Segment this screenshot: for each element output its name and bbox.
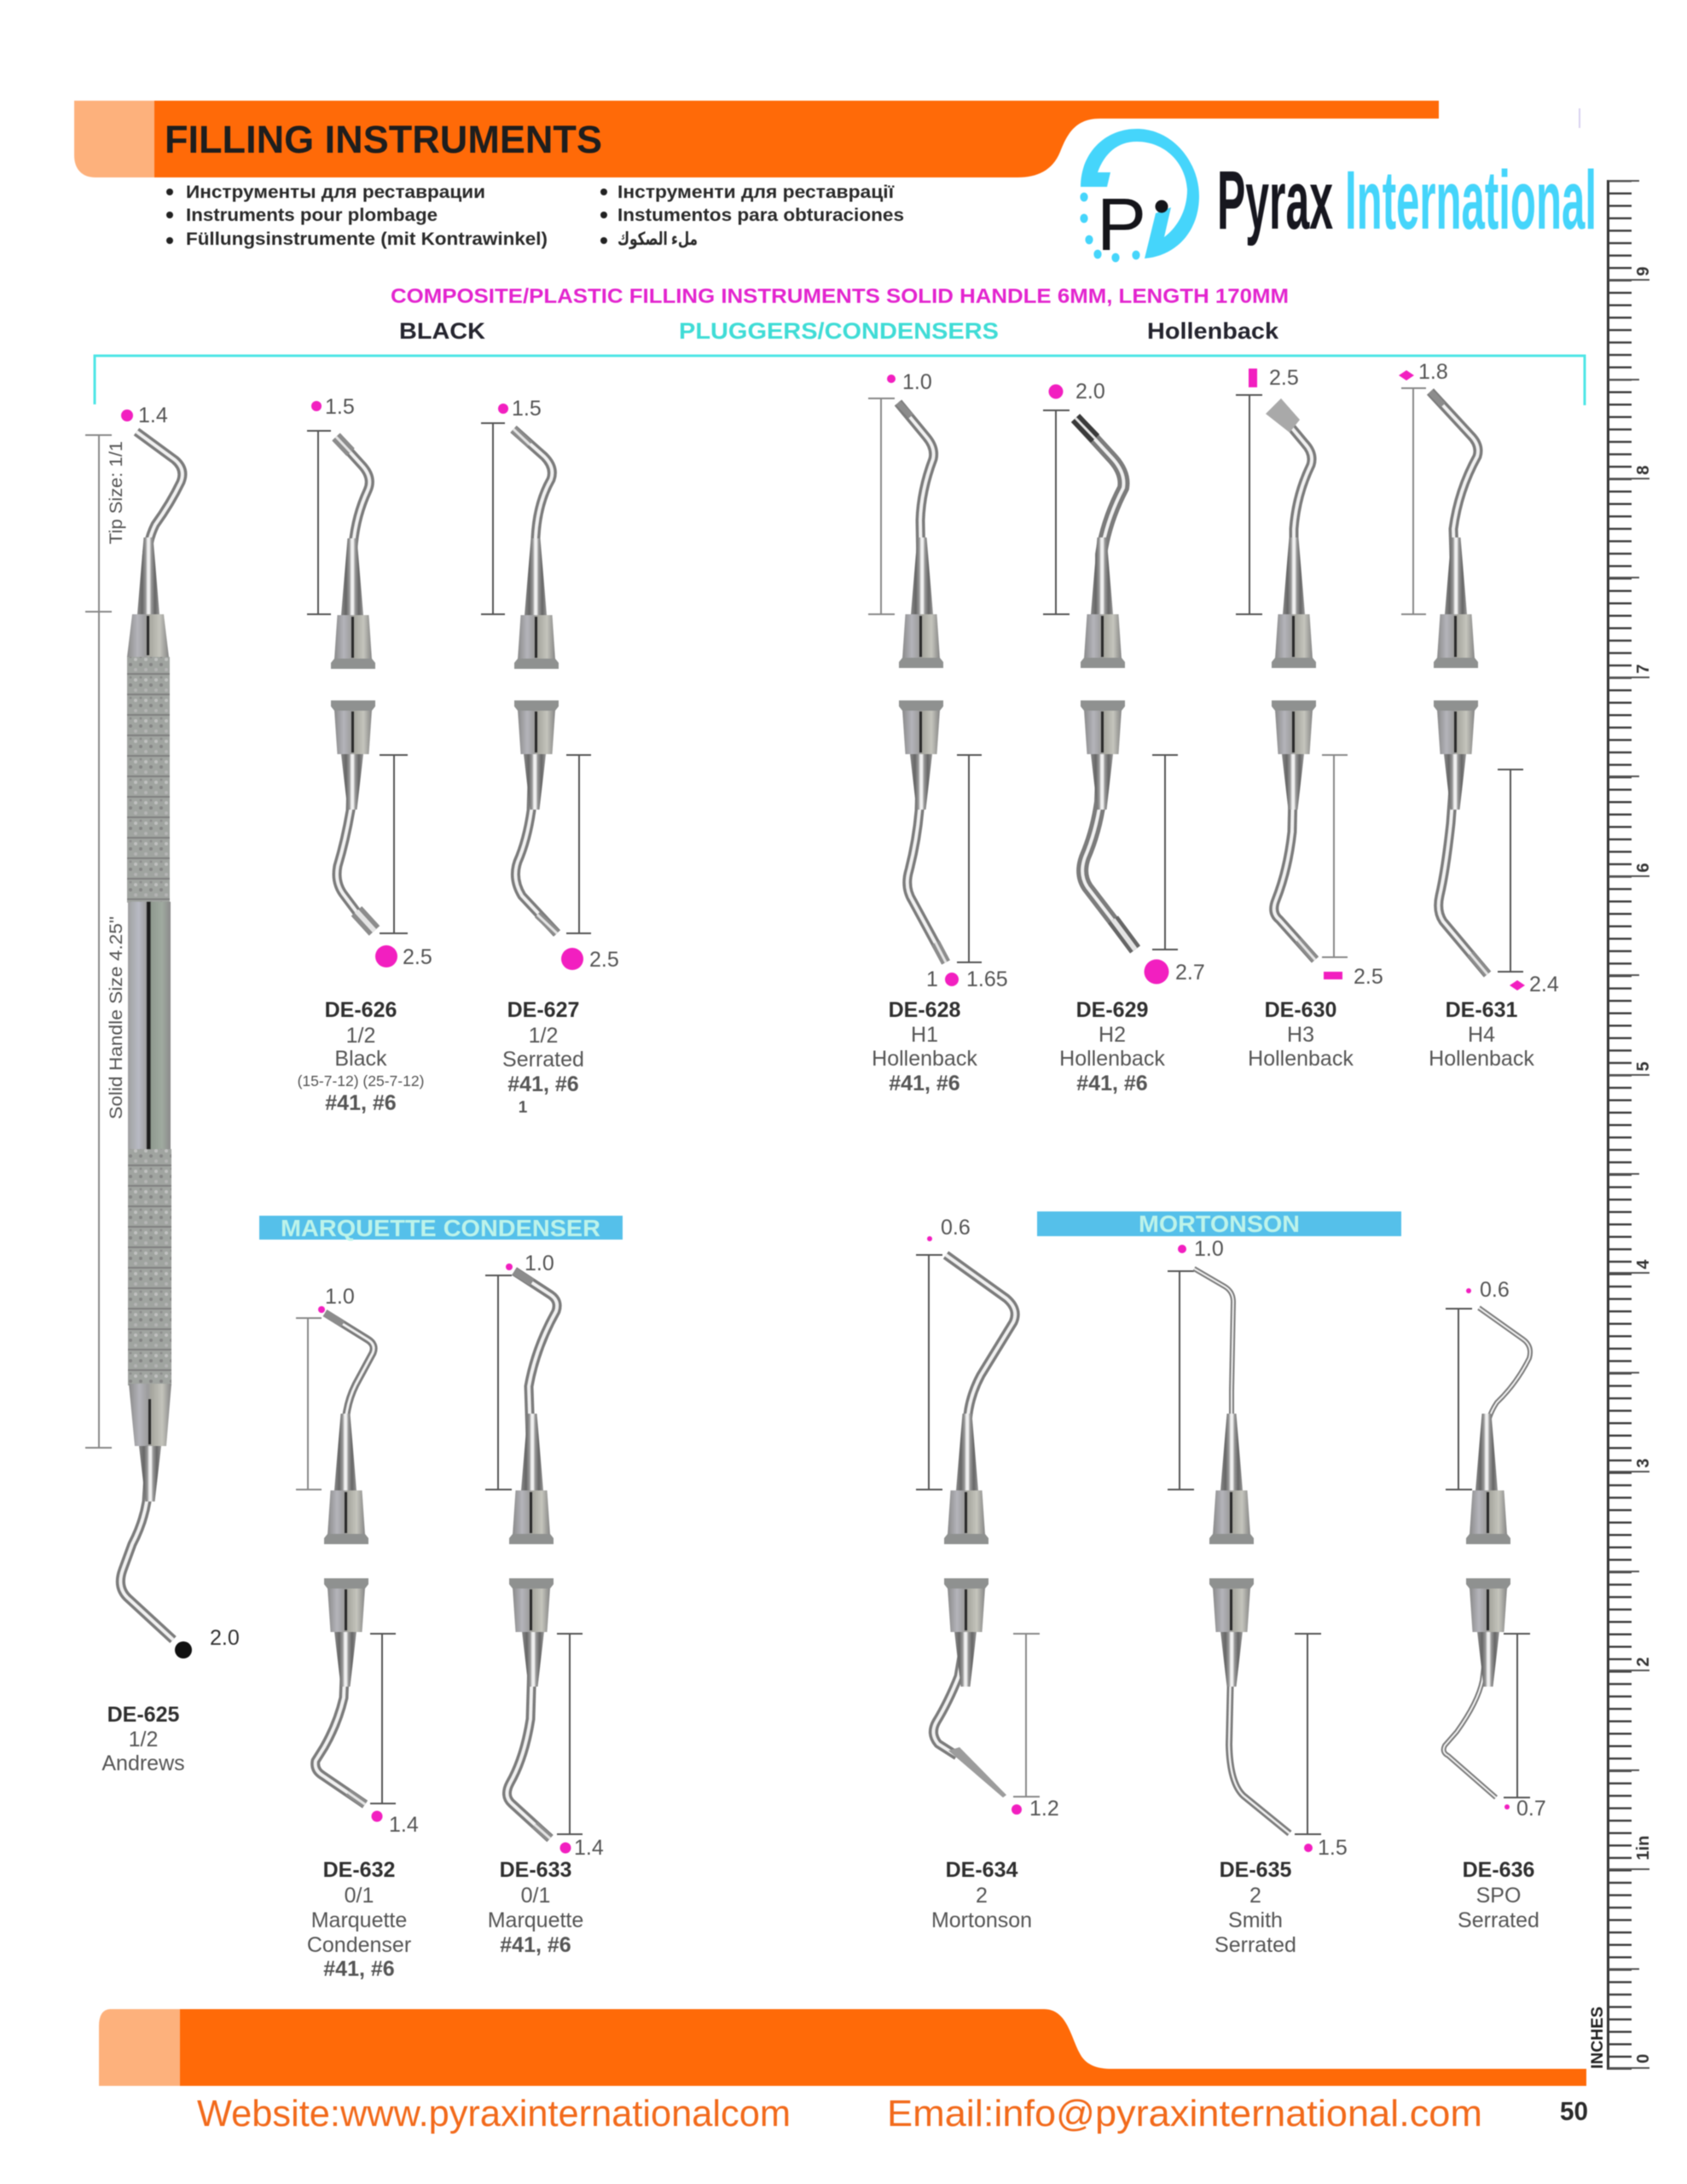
tip marker 2.0 [175,1626,240,1658]
column heading: black: BLACK [399,318,486,344]
tip marker [1510,973,1559,996]
product label: Mortonson [931,1908,1032,1932]
ruler: 5 [1634,1061,1653,1072]
lower working end [1081,700,1135,950]
product label: Marquette [311,1908,407,1932]
ruler [1589,180,1653,2070]
tip marker: 2.5 [1269,366,1299,390]
lower bracket [1295,1634,1321,1834]
product label: H4 [1468,1023,1495,1047]
lower working end [316,1578,368,1804]
column heading: pluggers/condensers: PLUGGERS/CONDENSERS [679,318,999,344]
upper working end [898,403,943,668]
product label: #41, #6 [507,1072,579,1096]
lower bracket [370,1634,396,1804]
instrument: DE-628 [868,370,1008,1095]
ruler: 2 [1634,1657,1653,1667]
product label: Smith [1228,1908,1283,1932]
tip marker: 1.0 [525,1252,554,1275]
ruler: 4 [1634,1259,1653,1269]
lower working end [933,1578,1006,1798]
tip marker: 1.5 [512,397,542,421]
instrument: DE-636 [1444,1278,1546,1932]
tip marker: 1.5 [1318,1836,1348,1860]
upper bracket [868,398,895,614]
instrument: DE-627 [481,397,619,1117]
logo: Pyrax International: Pyrax [1217,154,1333,247]
product label: DE-634 [946,1858,1017,1882]
multilingual subtitles: Instruments pour plombage [186,206,438,225]
product label: Andrews [101,1751,185,1775]
product label: DE-629 [1076,998,1148,1022]
tip marker [1145,959,1205,985]
lower working end [514,700,559,933]
instrument: DE-632 [296,1285,419,1981]
product label: DE-625 [107,1703,179,1727]
product label: Serrated [502,1048,584,1072]
multilingual subtitles [166,183,904,249]
lower bracket [1152,755,1178,950]
tip marker [1249,366,1299,390]
product label: H2 [1099,1023,1126,1047]
tip marker [498,397,542,421]
product label: DE-636 [1463,1858,1534,1882]
product label: #41, #6 [889,1072,960,1095]
upper bracket [1401,388,1426,614]
multilingual subtitles: ملء الصكوك [617,229,698,249]
tip marker [1012,1797,1059,1821]
product label: DE-630 [1265,998,1336,1022]
tip marker: 2.7 [1175,961,1205,985]
tip size bracket: Solid Handle Size 4.25" [107,916,126,1119]
tip marker: 0.6 [941,1216,971,1240]
tip marker [311,395,355,419]
multilingual subtitles: Інструменти для реставрації [617,183,895,202]
product label: DE-631 [1446,998,1517,1022]
tip marker [559,1836,604,1860]
lower working end [899,700,946,962]
ruler: 0 [1634,2053,1653,2064]
product label: Hollenback [872,1047,977,1071]
tip marker: 1.8 [1418,360,1448,384]
upper working end [331,437,375,669]
upper bracket [1446,1309,1472,1490]
column heading: hollenback: Hollenback [1147,318,1279,344]
title: FILLING INSTRUMENTS [165,118,602,161]
instrument: DE-625 full handle [85,404,240,1775]
product label: DE-627 [507,998,579,1022]
page number: 50 [1560,2096,1588,2126]
tip marker [1324,965,1383,989]
lower working end [1209,1578,1290,1833]
instrument: DE-630 [1236,366,1383,1071]
product label: DE-632 [323,1858,395,1882]
lower working end [507,1578,554,1838]
lower bracket [1504,1634,1530,1798]
product label: #41, #6 [323,1957,395,1981]
lower bracket [1498,770,1523,972]
product label: H3 [1287,1023,1314,1047]
tip marker [1178,1237,1224,1261]
upper bracket [1236,395,1262,614]
product label: H1 [911,1023,938,1047]
tip marker: 1.65 [966,967,1008,991]
product label: #41, #6 [500,1933,571,1957]
lower bracket [957,755,982,962]
tip size bracket [85,435,126,1448]
tip marker: 2.4 [1529,973,1559,996]
tip marker [1466,1278,1510,1302]
product label: 2 [976,1884,988,1908]
product label: 0/1 [345,1884,374,1908]
ruler: 8 [1634,465,1653,475]
upper working end [513,429,559,669]
multilingual subtitles: Instumentos para obturaciones [617,206,904,225]
tip marker 2.0: 2.0 [210,1626,240,1650]
product label: 0/1 [521,1884,550,1908]
lower bracket [380,755,408,933]
upper bracket [296,1318,322,1490]
instrument: DE-633 [485,1252,604,1957]
upper bracket [916,1255,942,1490]
product label: #41, #6 [1076,1072,1148,1095]
tip marker [1049,380,1105,404]
tip marker [927,1216,971,1241]
tip marker [1399,360,1448,384]
product label: SPO [1476,1884,1521,1908]
tip marker: 1.4 [389,1813,419,1837]
lower bracket [1013,1634,1040,1797]
instrument: DE-631 [1399,360,1559,1071]
upper shank [136,432,183,614]
lower bracket [557,1634,583,1834]
upper bracket [1168,1271,1194,1490]
lower working end [1272,700,1316,960]
tip marker: 1.2 [1029,1797,1059,1821]
upper bracket [485,1275,512,1490]
banner: mortonson: MORTONSON [1139,1211,1300,1237]
product label: Hollenback [1429,1047,1534,1071]
product label: Hollenback [1059,1047,1165,1071]
upper working end [1266,398,1316,668]
lower bracket [566,755,591,933]
tip marker [1304,1836,1348,1860]
ruler: 3 [1634,1458,1653,1468]
instrument: DE-629 [1043,380,1205,1095]
ruler: 1in [1634,1836,1653,1860]
ruler: 7 [1634,664,1653,674]
tip marker [561,948,619,972]
tip marker [926,967,1008,991]
tip marker: 2.5 [589,948,619,972]
instrument: DE-634 [916,1216,1059,1932]
tip marker [506,1252,554,1275]
tip marker 1.4 [121,404,168,427]
tip marker: 1.0 [325,1285,355,1309]
upper working end [1466,1308,1530,1544]
product label: Hollenback [1248,1047,1354,1071]
tip marker [372,1810,419,1837]
product label: Condenser [307,1933,411,1957]
product label: Serrated [1215,1933,1296,1957]
upper working end [324,1313,374,1544]
tip marker: 1.4 [574,1836,604,1860]
tip marker: 1.5 [325,395,355,419]
tip marker: 0.7 [1516,1797,1546,1821]
tip marker: 1.0 [902,370,932,394]
upper working end [944,1255,1015,1544]
header band [74,101,1439,177]
product label: DE-626 [325,998,397,1022]
tip marker: 0.6 [1480,1278,1510,1302]
handle [127,614,171,1446]
upper bracket [307,431,331,614]
tip marker: 2.5 [403,945,432,969]
footer band [99,2009,1586,2086]
upper working end [509,1271,557,1544]
lower shank [120,1446,173,1640]
tip marker: 1 [926,967,938,991]
footer website: Website:www.pyraxinternationalcom [197,2093,791,2135]
lower working end [1444,1578,1510,1798]
product label: DE-633 [500,1858,571,1882]
lower working end [1434,700,1487,974]
logo: Pyrax International: P [1097,183,1146,266]
product label: Marquette [488,1908,583,1932]
multilingual subtitles: Инструменты для реставрации [186,183,485,202]
tip marker: 2.5 [1354,965,1383,989]
tip marker [887,370,932,394]
cyan bracket [95,356,1585,405]
upper working end [1430,392,1478,668]
upper working end [1194,1269,1254,1544]
footer email: Email:info@pyraxinternational.com [887,2093,1482,2135]
instrument: DE-635 [1168,1237,1348,1957]
lower working end [331,700,375,931]
tip marker [318,1285,355,1313]
product label: 1/2 [529,1024,558,1048]
multilingual subtitles: Füllungsinstrumente (mit Kontrawinkel) [186,229,548,249]
tip marker 1.4: 1.4 [138,404,168,427]
product label: (15-7-12) (25-7-12) [298,1072,424,1089]
instrument: DE-626 [298,395,432,1115]
banner: mortonson [1037,1211,1401,1237]
product label: 1/2 [129,1728,158,1751]
product label: DE-628 [889,998,960,1022]
ruler: 6 [1634,863,1653,873]
banner: marquette condenser: MARQUETTE CONDENSER [281,1215,600,1241]
tip marker [375,945,432,969]
ruler: 9 [1634,266,1653,276]
product label: 1 [519,1099,528,1117]
ruler: INCHES [1589,2007,1607,2069]
upper bracket [1043,410,1070,614]
product label: 1/2 [346,1024,375,1048]
upper working end [1075,418,1125,668]
product label: #41, #6 [325,1091,397,1115]
logo: Pyrax International [1080,129,1597,266]
upper bracket [481,423,505,614]
section subtitle: COMPOSITE/PLASTIC FILLING INSTRUMENTS SOLID HANDLE 6MM, LENGTH 170MM [391,285,1289,308]
product label: DE-635 [1220,1858,1291,1882]
lower bracket [1322,755,1348,957]
tip marker: 1.0 [1194,1237,1224,1261]
product label: Black [334,1047,387,1071]
tip marker: 2.0 [1075,380,1105,404]
product label: 2 [1249,1884,1261,1908]
tip size bracket: Tip Size: 1/1 [107,441,126,544]
product label: Serrated [1458,1908,1539,1932]
